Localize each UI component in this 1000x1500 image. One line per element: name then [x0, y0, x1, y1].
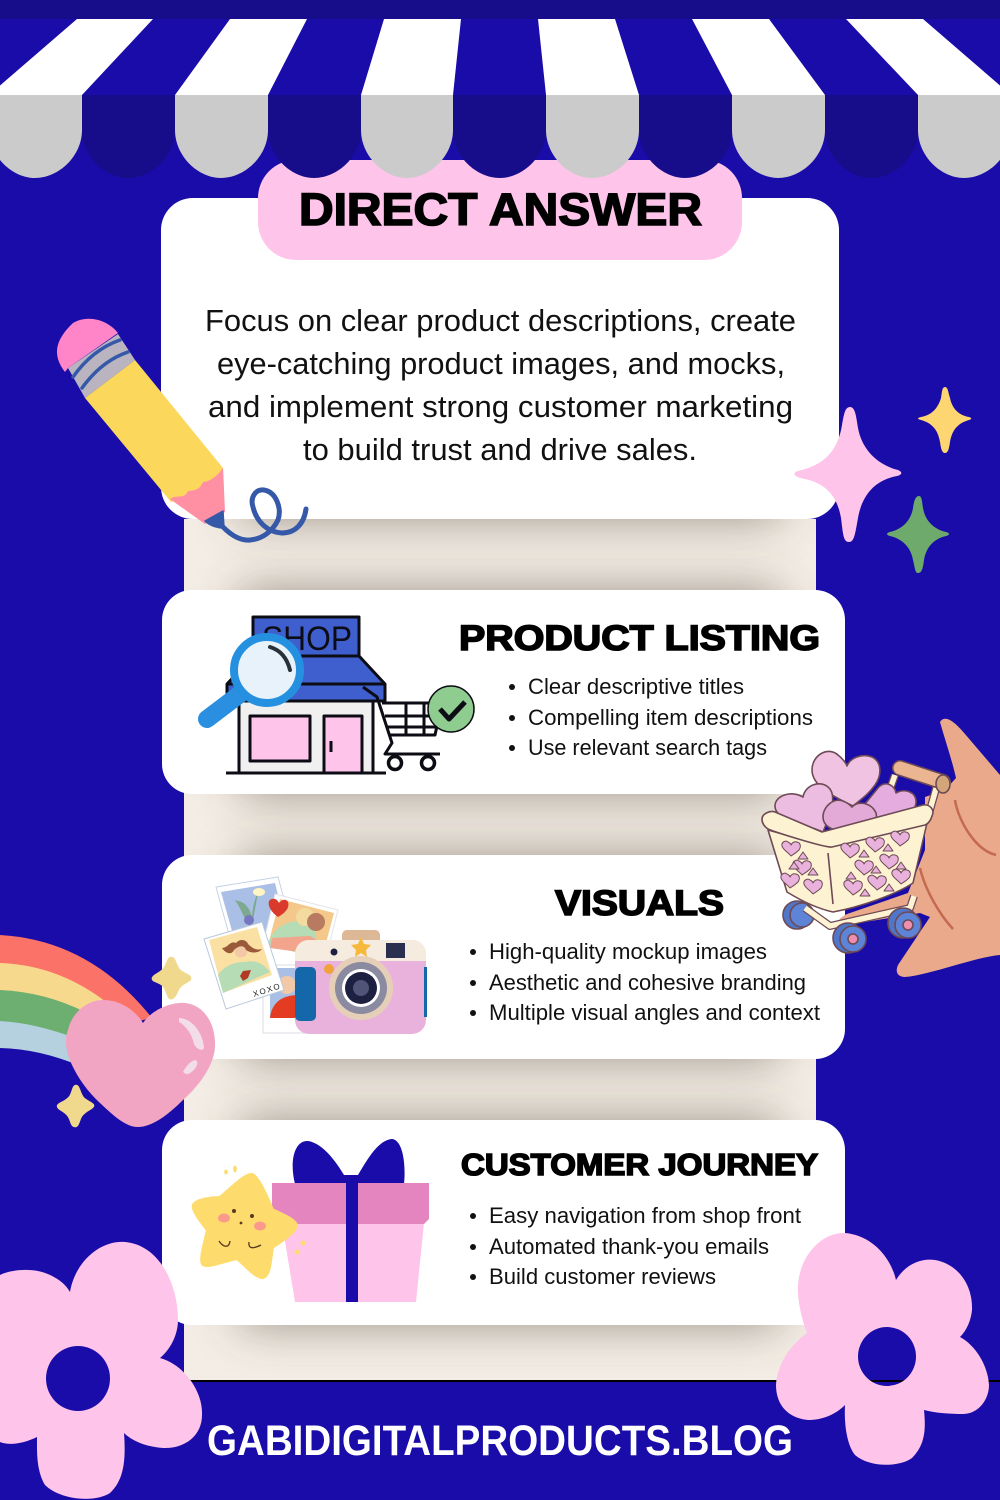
- rainbow sparkles: [58, 958, 190, 1126]
- bullet list: customer journey: [470, 1203, 801, 1289]
- icon: sparkles: [794, 387, 971, 573]
- bullet list: visuals: High-quality mockup images: [489, 939, 767, 964]
- heading pill: direct answer: [258, 160, 742, 260]
- icon: smiling star: [194, 1166, 306, 1277]
- bullet list: visuals: Multiple visual angles and context: [489, 1000, 820, 1025]
- icon: left flower: [0, 1242, 202, 1499]
- heart: [66, 1000, 215, 1127]
- bullet list: product listing: [509, 674, 813, 760]
- hand: [838, 719, 1000, 977]
- direct answer body text: and implement strong customer marketing: [208, 390, 793, 424]
- direct answer body text: to build trust and drive sales.: [303, 433, 697, 467]
- icon: gift box: [272, 1139, 429, 1302]
- icon: rainbow heart: [0, 935, 215, 1127]
- panel: product listing: [162, 590, 845, 794]
- heading: product listing: PRODUCT LISTING: [459, 619, 820, 658]
- bullet list: visuals: [470, 939, 820, 1025]
- beige back column: [184, 519, 816, 1380]
- heading: visuals: VISUALS: [555, 884, 724, 923]
- direct answer body text: Focus on clear product descriptions, create: [205, 304, 796, 338]
- direct answer body text: eye-catching product images, and mocks,: [217, 347, 785, 381]
- panel: direct answer: [161, 160, 839, 519]
- icon: right flower: [776, 1233, 989, 1465]
- bullet list: product listing: Compelling item descriptions: [528, 705, 813, 730]
- icon: hand holding heart cart: [762, 719, 1000, 977]
- panel: visuals: [162, 855, 845, 1059]
- bullet list: customer journey: Build customer reviews: [489, 1264, 716, 1289]
- shopping cart: [762, 751, 950, 953]
- hand crease lines: [920, 800, 996, 929]
- bullet list: customer journey: Easy navigation from shop front: [489, 1203, 801, 1228]
- bullet list: product listing: Clear descriptive titles: [528, 674, 744, 699]
- icon: pencil with squiggle: [57, 319, 306, 540]
- heading: customer journey: CUSTOMER JOURNEY: [461, 1147, 818, 1182]
- bullet list: customer journey: Automated thank-you emails: [489, 1234, 769, 1259]
- icon: shop with magnifier and cart: [207, 617, 474, 773]
- footer website: GABIDIGITALPRODUCTS.BLOG: [207, 1417, 793, 1465]
- bullet list: visuals: Aesthetic and cohesive branding: [489, 970, 806, 995]
- panel: customer journey: [162, 1120, 845, 1325]
- awning: [0, 0, 1000, 178]
- icon: shop with magnifier and cart: SHOP: [262, 620, 352, 658]
- heart highlight: [179, 1018, 204, 1074]
- icon: photos and camera: XOXO: [252, 981, 282, 999]
- direct answer body text: [205, 304, 796, 467]
- bullet list: product listing: Use relevant search tags: [528, 735, 767, 760]
- rainbow bands: [0, 935, 152, 1066]
- icon: photos and camera: [204, 877, 427, 1034]
- title: direct answer: DIRECT ANSWER: [299, 184, 702, 235]
